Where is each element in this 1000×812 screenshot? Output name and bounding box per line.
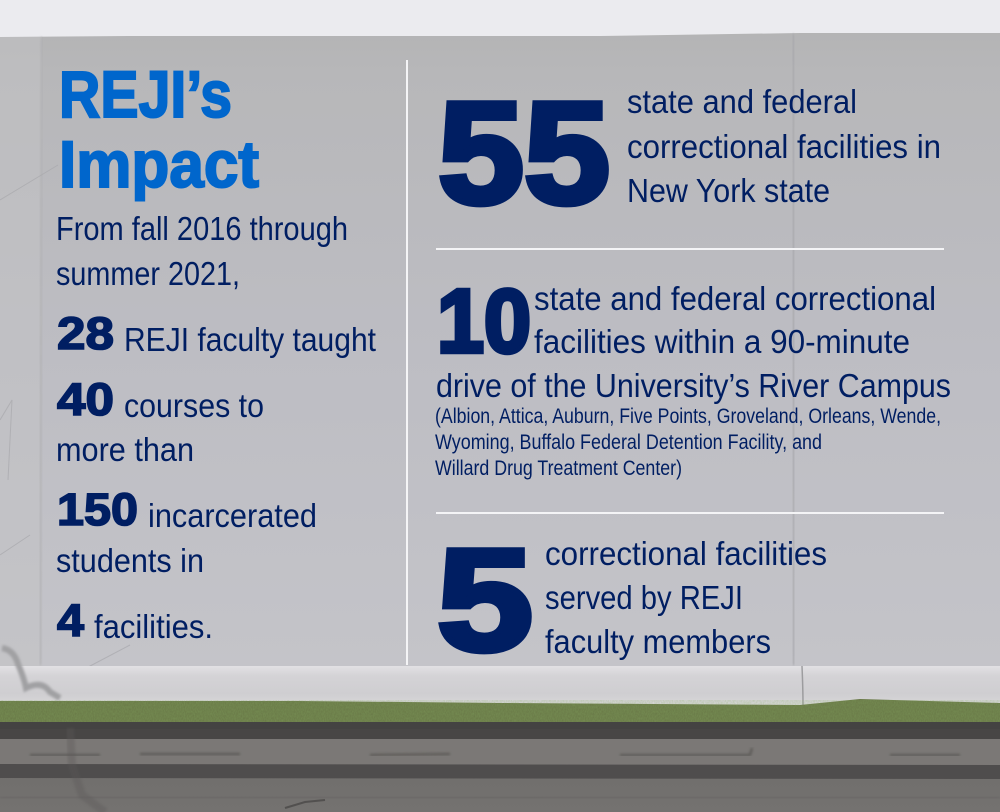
- stat: 5 facilities served: 5: [437, 519, 533, 681]
- background: road with curb: [0, 722, 1000, 812]
- vertical divider: [406, 60, 408, 665]
- stat: 150 students: incarcerated: [148, 497, 317, 534]
- stat: 40 courses: more than: [56, 431, 194, 468]
- heading: REJI's Impact: REJI’s: [59, 57, 232, 131]
- stat: 10 facilities within 90 minutes: state and federal correctional: [534, 280, 936, 317]
- stat: 10 facilities within 90 minutes: facilities within a 90-minute: [534, 323, 910, 360]
- text: list of facilities: [435, 405, 941, 480]
- text: intro: [56, 210, 348, 292]
- stat: 5 facilities served: faculty members: [545, 623, 771, 660]
- stat: 55 facilities in New York: state and federal: [627, 83, 857, 120]
- stat: 4 facilities: [57, 595, 213, 646]
- divider line: [436, 512, 944, 514]
- stat: 4 facilities: 4: [57, 595, 84, 646]
- text: intro: From fall 2016 through: [56, 210, 348, 247]
- stat: 55 facilities in New York: New York state: [627, 172, 830, 209]
- stat: 10 facilities within 90 minutes: drive of the University’s River Campus: [436, 367, 951, 404]
- text: list of facilities: Willard Drug Treatment Center): [435, 457, 682, 480]
- heading: REJI's Impact: [59, 57, 259, 201]
- background: wall base ledge: [0, 648, 1000, 706]
- panel: right column statistics: [435, 72, 951, 681]
- stat: 28 faculty: [57, 308, 376, 359]
- stat: 5 facilities served: correctional facilities: [545, 535, 827, 572]
- heading: REJI's Impact: Impact: [59, 127, 259, 201]
- stat: 40 courses: 40: [57, 374, 114, 425]
- panel: left column summary: [56, 57, 376, 646]
- stat: 10 facilities within 90 minutes: 10: [437, 272, 531, 372]
- stat: 40 courses: [56, 374, 264, 468]
- text: intro: summer 2021,: [56, 255, 240, 292]
- stat: 28 faculty: 28: [57, 308, 114, 359]
- stat: 55 facilities in New York: correctional facilities in: [627, 128, 941, 165]
- stat: 5 facilities served: [437, 519, 827, 681]
- background: grass strip: [0, 699, 1000, 723]
- background: sky: [0, 0, 1000, 40]
- stat: 5 facilities served: served by REJI: [545, 579, 743, 616]
- stat: 28 faculty: REJI faculty taught: [124, 321, 376, 358]
- stat: 55 facilities in New York: 55: [438, 72, 610, 234]
- stat: 150 students: [56, 484, 317, 579]
- text: list of facilities: Wyoming, Buffalo Federal Detention Facility, and: [435, 431, 822, 454]
- stat: 150 students: 150: [57, 484, 138, 535]
- stat: 40 courses: courses to: [124, 387, 264, 424]
- stat: 10 facilities within 90 minutes: [435, 272, 951, 480]
- stat: 4 facilities: facilities.: [94, 608, 213, 645]
- stat: 150 students: students in: [56, 542, 204, 579]
- stat: 55 facilities in New York: [438, 72, 941, 234]
- divider line: [436, 248, 944, 250]
